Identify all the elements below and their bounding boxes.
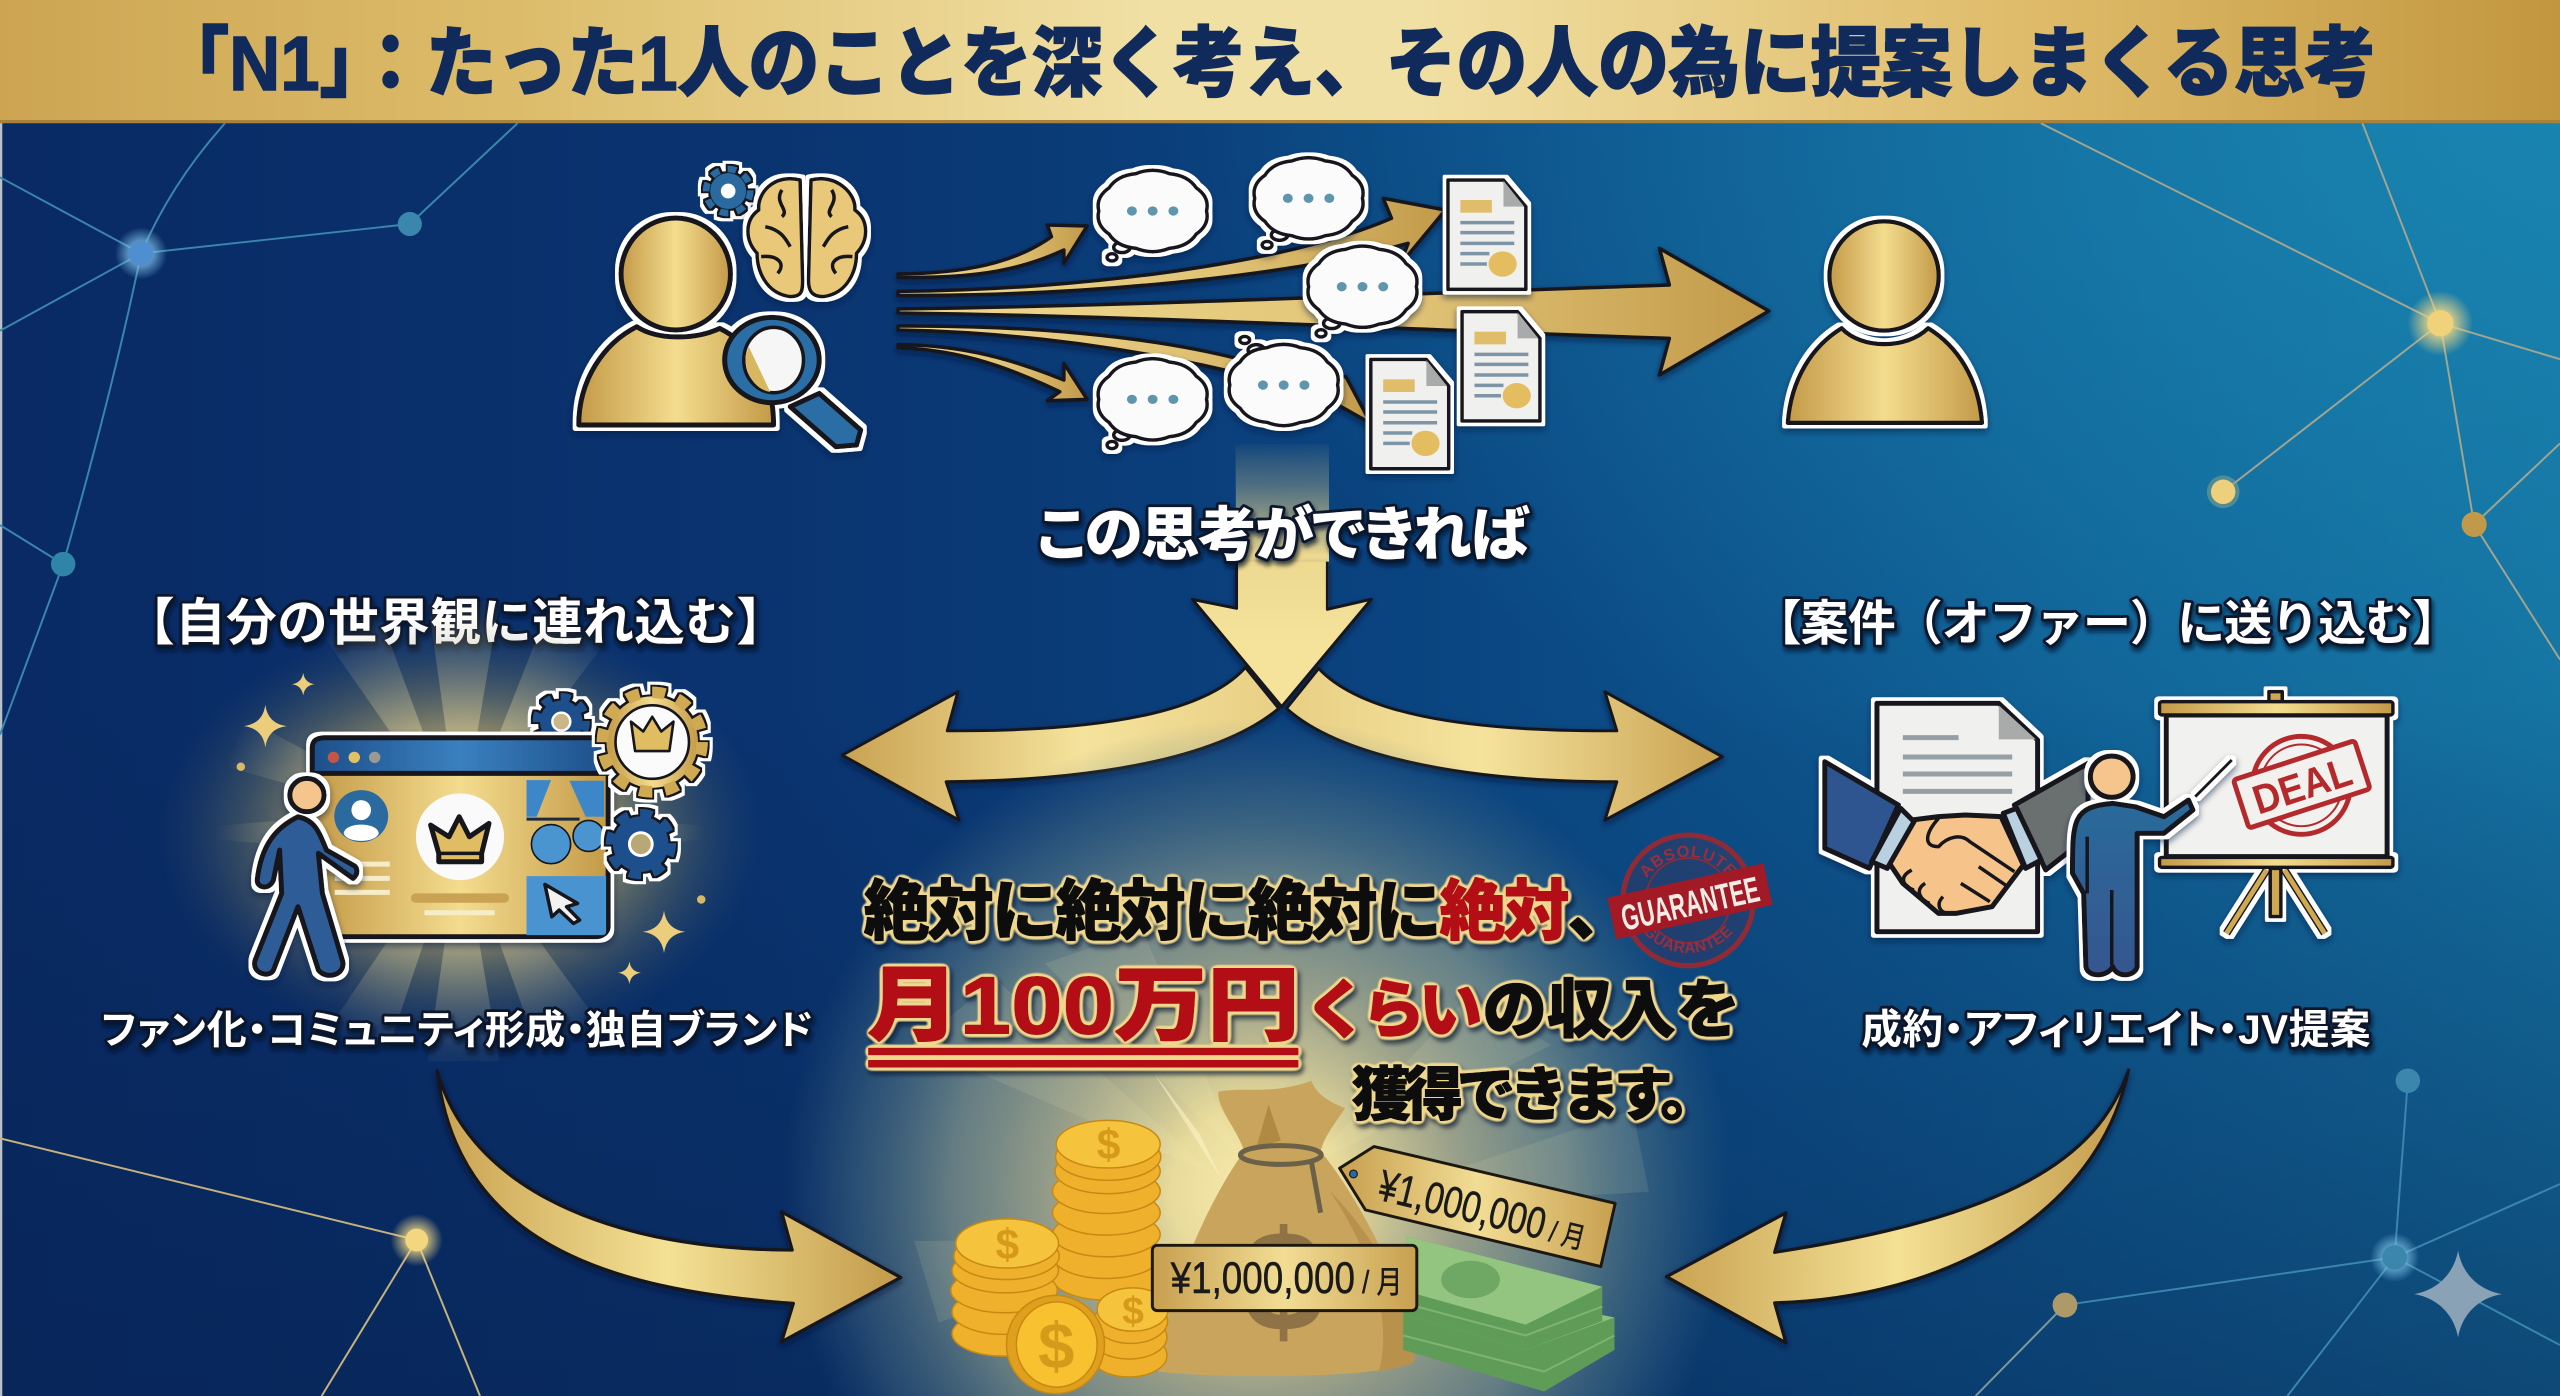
icon: thinker with gear, brain and magnifier bbox=[579, 169, 866, 447]
arrow: split centre bbox=[1192, 562, 1371, 707]
bag dollar mark: $ bbox=[1243, 1202, 1323, 1362]
headline: double underline bbox=[869, 1048, 1298, 1067]
label: left heading: 【自分の世界観に連れ込む】 bbox=[124, 594, 787, 651]
arrow: lower bbox=[898, 326, 1371, 423]
headline: line 3: 獲得できます。 bbox=[1352, 1063, 1719, 1128]
headline: の収入を: の収入を bbox=[1482, 974, 1740, 1046]
arrow: split left bbox=[842, 667, 1279, 820]
label: right heading: 【案件（オファー）に送り込む】 bbox=[1753, 597, 2460, 651]
coin dollar marks: $ bbox=[1097, 1121, 1120, 1168]
glow bbox=[158, 601, 762, 1061]
coin dollar marks: $ bbox=[996, 1221, 1019, 1268]
icon: coin stacks bbox=[951, 1120, 1168, 1394]
money illustration bbox=[951, 1081, 1615, 1394]
proposal documents bbox=[1371, 180, 1540, 469]
stamp: DEAL bbox=[2233, 736, 2370, 834]
title: 「N1」：たった1人のことを深く考え、その人の為に提案しまくる思考 bbox=[158, 22, 2376, 107]
price tag: front: ¥1,000,000 / 月 bbox=[1170, 1254, 1402, 1303]
headline bbox=[864, 875, 1740, 1128]
stem arrow rising into the label bbox=[1192, 444, 1371, 707]
network: bottom left bbox=[0, 1138, 480, 1396]
headline: 月100万円: 月100万円 bbox=[867, 961, 1300, 1052]
stamp: guarantee: ABSOLUTE bbox=[1641, 846, 1737, 878]
network: top left bbox=[0, 123, 518, 735]
icon: corner sparkle bbox=[2414, 1251, 2502, 1337]
icon: panel gears bbox=[531, 820, 604, 864]
label: left caption: ファン化・コミュニティ形成・独自ブランド bbox=[101, 1008, 813, 1052]
coin dollar marks: $ bbox=[1122, 1290, 1144, 1333]
price tag: hanging: ¥1,000,000 / 月 bbox=[1373, 1161, 1591, 1259]
arrow head: split down bbox=[842, 562, 1722, 820]
label: right caption: 成約・アフィリエイト・JV提案 bbox=[1861, 1006, 2371, 1052]
arrows: five diverging idea arrows bbox=[898, 198, 1769, 423]
glow behind money bbox=[784, 718, 1731, 1396]
panel: right illustration, deal bbox=[1825, 692, 2393, 975]
price tag: hanging bbox=[1340, 1147, 1615, 1267]
arrow: bottom bbox=[898, 345, 1087, 401]
icon: blue gear bbox=[706, 169, 750, 213]
price tag: front bbox=[1152, 1245, 1417, 1311]
arrow: left result bbox=[437, 1071, 901, 1342]
stamp: guarantee: GUARANTEE bbox=[1617, 868, 1763, 939]
icon: target person bbox=[1788, 221, 1982, 423]
stamp: guarantee bbox=[1607, 832, 1772, 968]
icon: presenter bbox=[2072, 756, 2232, 975]
icon: crown gear bbox=[602, 692, 702, 792]
network: top right bbox=[2041, 123, 2560, 660]
arrow: main to person bbox=[898, 248, 1769, 375]
label: この思考ができれば: この思考ができれば bbox=[1037, 502, 1531, 568]
icon: lower gear bbox=[610, 813, 672, 875]
coin dollar marks bbox=[996, 1121, 1144, 1382]
arrow: split right bbox=[1287, 668, 1722, 820]
icon: contract and handshake bbox=[1825, 703, 2088, 932]
arrow: upper bbox=[898, 198, 1445, 295]
icon: money bag bbox=[1158, 1081, 1414, 1376]
thought bubbles bbox=[1098, 158, 1417, 449]
coin dollar marks: $ bbox=[1038, 1309, 1074, 1382]
icon: sparkles bbox=[237, 673, 705, 984]
headline: くらい: くらい bbox=[1304, 975, 1482, 1046]
icon: person, brain, magnifier bbox=[579, 179, 866, 447]
network: bottom right bbox=[1976, 1068, 2560, 1396]
panel: left illustration, world view bbox=[158, 601, 762, 1061]
browser window bbox=[312, 738, 608, 937]
icon: presentation board bbox=[2159, 692, 2393, 933]
icon: cash stacks bbox=[1403, 1236, 1614, 1391]
title bar bbox=[0, 0, 2560, 123]
headline: line 1: 絶対に絶対に絶対に絶対、 bbox=[864, 875, 1632, 949]
icon: walking person bbox=[255, 778, 357, 975]
stamp: DEAL: DEAL bbox=[2247, 748, 2357, 823]
stamp: guarantee: GUARANTEE bbox=[1645, 925, 1733, 953]
arrow: right result bbox=[1666, 1070, 2128, 1343]
arrow: top bbox=[898, 225, 1087, 277]
icon: small blue gears behind bbox=[537, 697, 586, 746]
